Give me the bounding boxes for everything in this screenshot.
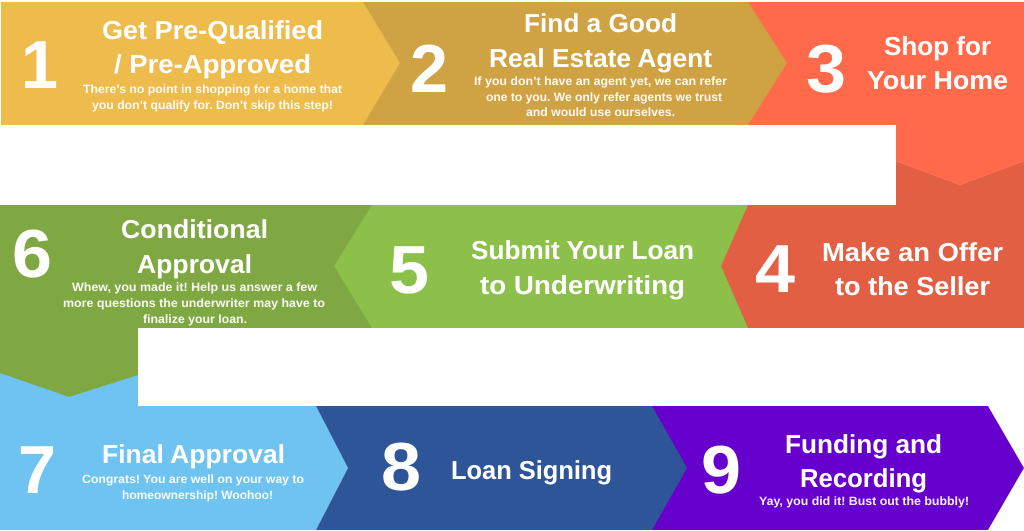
description 1: you don’t qualify for. Don’t skip this step!	[92, 98, 333, 112]
step 6: conditional approval	[0, 205, 376, 397]
arrow panel 8	[316, 406, 687, 530]
description 6: more questions the underwriter may have to	[63, 296, 325, 310]
number 8: 8	[381, 429, 421, 505]
number 6: 6	[12, 216, 52, 292]
heading 8: Loan Signing	[451, 455, 612, 485]
heading 1: Get Pre-Qualified	[102, 15, 323, 45]
number 9: 9	[701, 432, 741, 508]
heading 1: / Pre-Approved	[114, 49, 311, 79]
arrow panel 4	[721, 161, 1024, 328]
description 6: Whew, you made it! Help us answer a few	[72, 280, 318, 294]
step 1: get pre-qualified	[1, 2, 400, 125]
arrow panel 2	[360, 2, 787, 125]
step 3: shop for your home	[745, 2, 1024, 185]
arrow panel 3	[745, 2, 1024, 185]
arrow panel 1	[1, 2, 400, 125]
heading 2: Find a Good	[524, 8, 677, 38]
description 2: and would use ourselves.	[526, 105, 675, 119]
arrow panel 9	[648, 406, 1024, 530]
heading 4: Make an Offer	[822, 237, 1003, 267]
heading 9: Recording	[800, 463, 927, 493]
heading 7: Final Approval	[102, 439, 285, 469]
heading 5: Submit Your Loan	[471, 235, 694, 265]
heading 6: Approval	[137, 249, 252, 279]
heading 4: to the Seller	[835, 271, 990, 301]
number 2: 2	[410, 31, 448, 107]
description 7: Congrats! You are well on your way to	[82, 472, 304, 486]
description 9: Yay, you did it! Bust out the bubbly!	[759, 494, 969, 508]
number 7: 7	[18, 432, 56, 508]
step 4: make an offer	[721, 161, 1024, 328]
description 6: finalize your loan.	[143, 312, 247, 326]
step 7: final approval	[0, 370, 348, 530]
number 4: 4	[755, 231, 795, 307]
heading 2: Real Estate Agent	[489, 43, 712, 73]
description 1: There’s no point in shopping for a home that	[83, 82, 342, 96]
step 2: find a good real estate agent	[360, 2, 787, 125]
step 9: funding and recording	[648, 406, 1024, 530]
description 7: homeownership! Woohoo!	[122, 488, 273, 502]
number 5: 5	[389, 232, 429, 308]
step 5: submit your loan	[334, 205, 752, 328]
heading 5: to Underwriting	[480, 270, 685, 300]
heading 3: Your Home	[867, 65, 1008, 95]
arrow panel 5	[334, 205, 752, 328]
step 8: loan signing	[316, 406, 687, 530]
description 2: one to you. We only refer agents we trust	[486, 90, 722, 104]
number 1: 1	[21, 27, 58, 103]
heading 6: Conditional	[121, 214, 268, 244]
arrow panel 7	[0, 370, 348, 530]
description 2: If you don’t have an agent yet, we can refer	[474, 74, 727, 88]
heading 9: Funding and	[785, 429, 942, 459]
arrow panel 6	[0, 205, 376, 397]
number 3: 3	[806, 31, 846, 107]
heading 3: Shop for	[884, 31, 991, 61]
